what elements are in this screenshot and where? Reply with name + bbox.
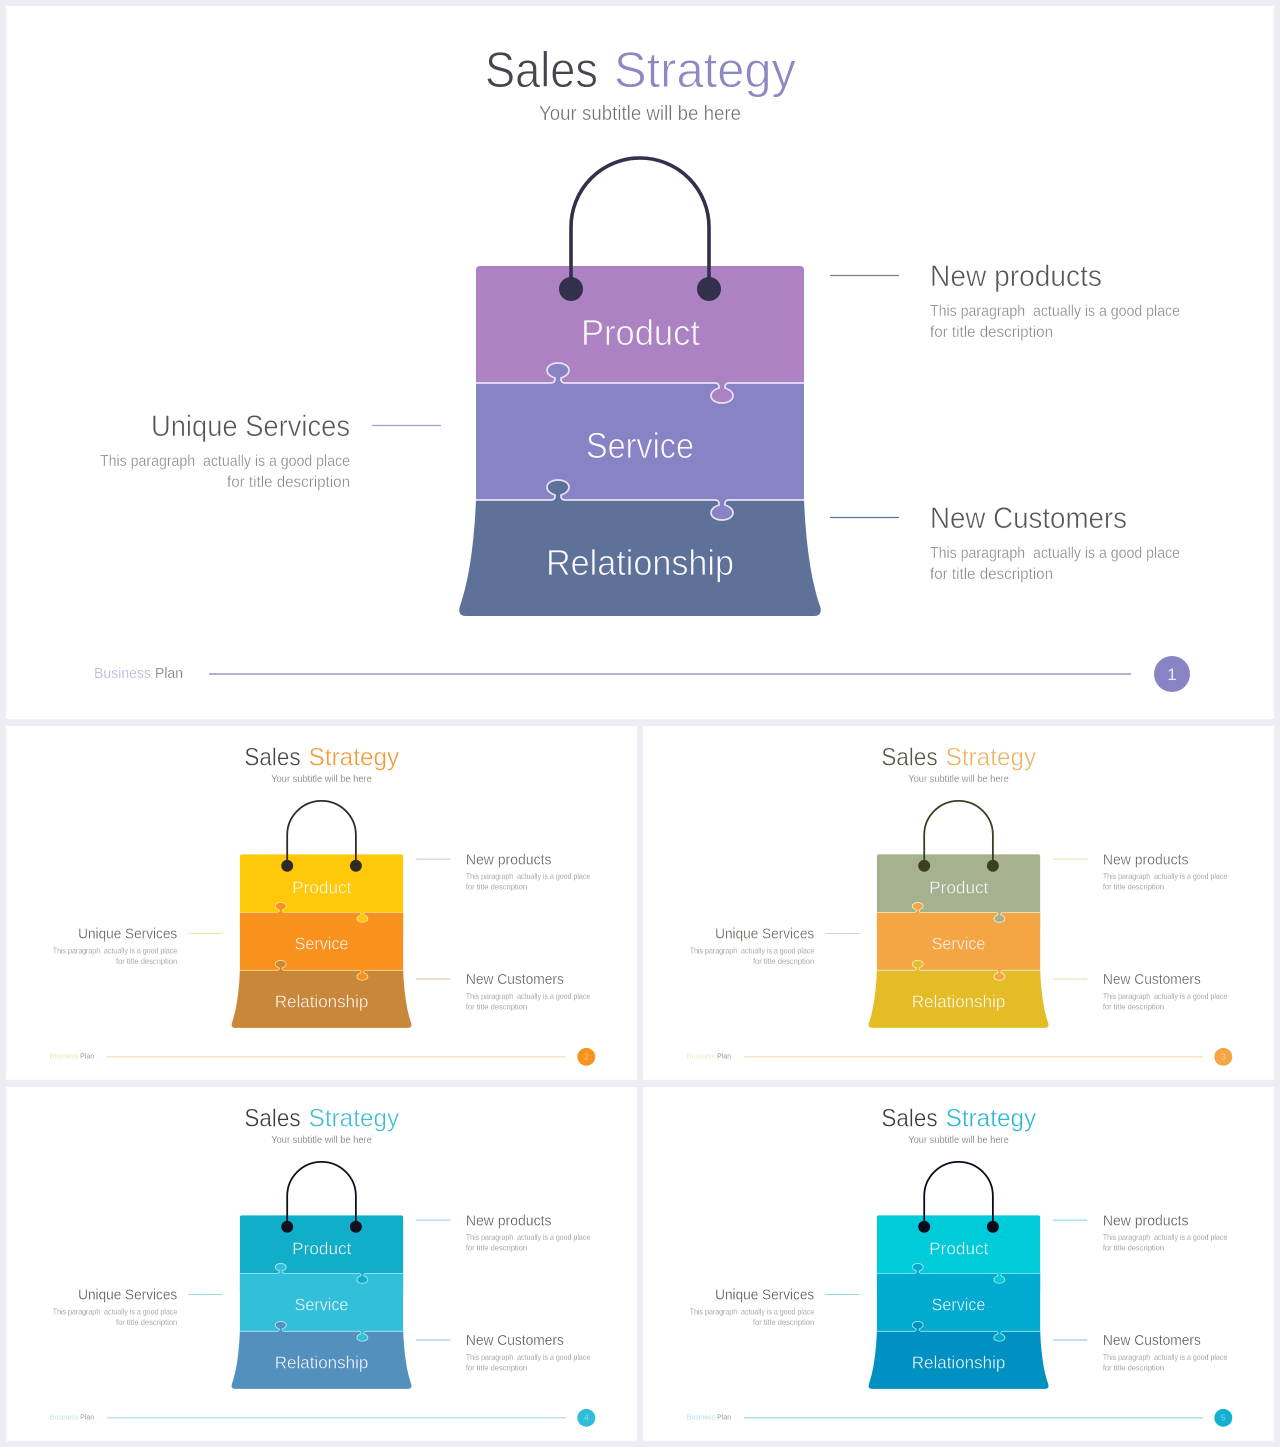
callout: New Customers: This paragraph actually is a good place: [930, 545, 1180, 562]
callout: New products: This paragraph actually is a good place: [930, 303, 1180, 320]
callout: New products: This paragraph actually is a good place: [1103, 872, 1228, 881]
icon: bag handle: [559, 158, 721, 301]
callout: New products: [416, 852, 591, 892]
callout: New Customers: [1053, 972, 1228, 1011]
panel: slide 5 (aqua and deep blue): [643, 1087, 1274, 1441]
callout: Unique Services: for title description: [753, 957, 814, 966]
title: [244, 745, 400, 772]
callout: New products: for title description: [466, 883, 527, 892]
callout: Unique Services: [690, 927, 859, 966]
footer: Business: [687, 1413, 715, 1422]
icon: bag handle: [918, 801, 999, 872]
callout: New products: [830, 260, 1180, 341]
callout: Unique Services: Unique Services: [715, 1288, 814, 1304]
callout: New Customers: for title description: [466, 1003, 527, 1011]
footer: [50, 1048, 595, 1066]
callout: Unique Services: Unique Services: [151, 410, 350, 443]
footer: [687, 1409, 1232, 1427]
footer: 5: [1221, 1413, 1226, 1423]
subtitle: Your subtitle will be here: [539, 103, 741, 125]
callout: New products: for title description: [930, 324, 1053, 341]
callout: New products: for title description: [1103, 883, 1164, 892]
footer: Business: [50, 1413, 78, 1422]
callout: New products: [1053, 852, 1228, 892]
icon: bag handle: [281, 801, 362, 872]
callout: New Customers: [1053, 1333, 1228, 1372]
callout: Unique Services: [53, 927, 222, 966]
callout: New products: for title description: [1103, 1244, 1164, 1253]
callout: New Customers: for title description: [930, 566, 1053, 583]
callout: New Customers: [830, 502, 1180, 583]
title: Strategy: [614, 42, 796, 98]
footer: 3: [1221, 1052, 1226, 1062]
title: Strategy: [309, 745, 400, 772]
callout: New products: This paragraph actually is a good place: [1103, 1233, 1228, 1242]
label: Relationship: Relationship: [912, 992, 1005, 1012]
footer: Plan: [155, 665, 183, 682]
footer: Plan: [717, 1052, 731, 1061]
callout: New Customers: for title description: [1103, 1003, 1164, 1011]
subtitle: Your subtitle will be here: [271, 1135, 372, 1146]
label: Service: Service: [295, 934, 348, 954]
title: [881, 745, 1037, 772]
callout: Unique Services: Unique Services: [715, 927, 814, 943]
shopping bag diagram: [232, 801, 411, 1028]
subtitle: Your subtitle will be here: [908, 774, 1009, 785]
panel: slide 4 (teal and blue): [6, 1087, 637, 1441]
callout: Unique Services: Unique Services: [78, 927, 177, 943]
callout: New products: New products: [466, 1213, 551, 1229]
shopping bag diagram: [869, 1162, 1048, 1389]
label: Service: Service: [932, 934, 985, 954]
callout: New products: [1053, 1213, 1228, 1253]
title: Sales: [244, 745, 301, 772]
label: Product: Product: [929, 1239, 988, 1259]
callout: New Customers: This paragraph actually is a good place: [1103, 992, 1228, 1001]
callout: New Customers: This paragraph actually is a good place: [1103, 1353, 1228, 1362]
callout: New Customers: [416, 972, 591, 1011]
callout: New Customers: New Customers: [930, 502, 1127, 535]
callout: New Customers: This paragraph actually is a good place: [466, 1353, 591, 1362]
label: Relationship: Relationship: [275, 1353, 368, 1373]
subtitle: Your subtitle will be here: [908, 1135, 1009, 1146]
callout: New products: New products: [1103, 1213, 1188, 1229]
label: Product: Product: [929, 878, 988, 898]
callout: New Customers: This paragraph actually is a good place: [466, 992, 591, 1001]
footer: 1: [1167, 665, 1177, 684]
callout: Unique Services: for title description: [227, 474, 350, 491]
footer: Plan: [80, 1413, 94, 1422]
callout: New products: New products: [1103, 852, 1188, 868]
footer: 2: [584, 1052, 589, 1062]
callout: New products: This paragraph actually is a good place: [466, 1233, 591, 1242]
panel: main slide (purple): [6, 6, 1274, 719]
label: Product: Product: [292, 878, 351, 898]
footer: Business: [687, 1052, 715, 1061]
callout: New Customers: New Customers: [1103, 972, 1201, 988]
callout: New Customers: for title description: [466, 1364, 527, 1372]
panel: slide 2 (orange): [6, 726, 637, 1080]
callout: Unique Services: This paragraph actually is a good place: [690, 1308, 815, 1316]
callout: Unique Services: [690, 1288, 859, 1327]
footer: Business: [94, 665, 151, 682]
callout: Unique Services: for title description: [753, 1318, 814, 1327]
title: [881, 1106, 1037, 1133]
title: [244, 1106, 400, 1133]
label: Service: Service: [295, 1295, 348, 1315]
shopping bag diagram: [869, 801, 1048, 1028]
callout: New Customers: New Customers: [466, 1333, 564, 1349]
callout: Unique Services: for title description: [116, 957, 177, 966]
icon: bag handle: [918, 1162, 999, 1233]
panel: slide 3 (olive and amber): [643, 726, 1274, 1080]
callout: New products: This paragraph actually is a good place: [466, 872, 591, 881]
callout: Unique Services: This paragraph actually is a good place: [53, 947, 178, 955]
callout: New products: New products: [930, 260, 1102, 293]
subtitle: Your subtitle will be here: [271, 774, 372, 785]
callout: Unique Services: This paragraph actually is a good place: [53, 1308, 178, 1316]
shopping bag diagram: [459, 158, 821, 616]
icon: bag handle: [281, 1162, 362, 1233]
title: Strategy: [946, 745, 1037, 772]
title: Sales: [881, 745, 938, 772]
label: Product: Product: [581, 312, 700, 353]
label: Relationship: Relationship: [546, 542, 734, 583]
callout: New Customers: for title description: [1103, 1364, 1164, 1372]
callout: Unique Services: [53, 1288, 222, 1327]
title: Strategy: [946, 1106, 1037, 1133]
footer: Business: [50, 1052, 78, 1061]
callout: Unique Services: This paragraph actually is a good place: [690, 947, 815, 955]
label: Relationship: Relationship: [912, 1353, 1005, 1373]
label: Service: Service: [932, 1295, 985, 1315]
callout: New products: for title description: [466, 1244, 527, 1253]
callout: New products: [416, 1213, 591, 1253]
callout: New Customers: New Customers: [1103, 1333, 1201, 1349]
callout: Unique Services: Unique Services: [78, 1288, 177, 1304]
footer: Plan: [717, 1413, 731, 1422]
label: Service: Service: [586, 425, 694, 466]
callout: New Customers: New Customers: [466, 972, 564, 988]
footer: Plan: [80, 1052, 94, 1061]
title: Strategy: [309, 1106, 400, 1133]
footer: [687, 1048, 1232, 1066]
title: Sales: [881, 1106, 938, 1133]
title: Sales: [244, 1106, 301, 1133]
callout: Unique Services: [100, 410, 441, 491]
callout: Unique Services: This paragraph actually is a good place: [100, 453, 350, 470]
title: Sales: [485, 42, 598, 98]
callout: New Customers: [416, 1333, 591, 1372]
shopping bag diagram: [232, 1162, 411, 1389]
label: Product: Product: [292, 1239, 351, 1259]
callout: New products: New products: [466, 852, 551, 868]
footer: [50, 1409, 595, 1427]
footer: [94, 656, 1190, 692]
callout: Unique Services: for title description: [116, 1318, 177, 1327]
title: [485, 42, 796, 98]
footer: 4: [584, 1413, 589, 1423]
label: Relationship: Relationship: [275, 992, 368, 1012]
